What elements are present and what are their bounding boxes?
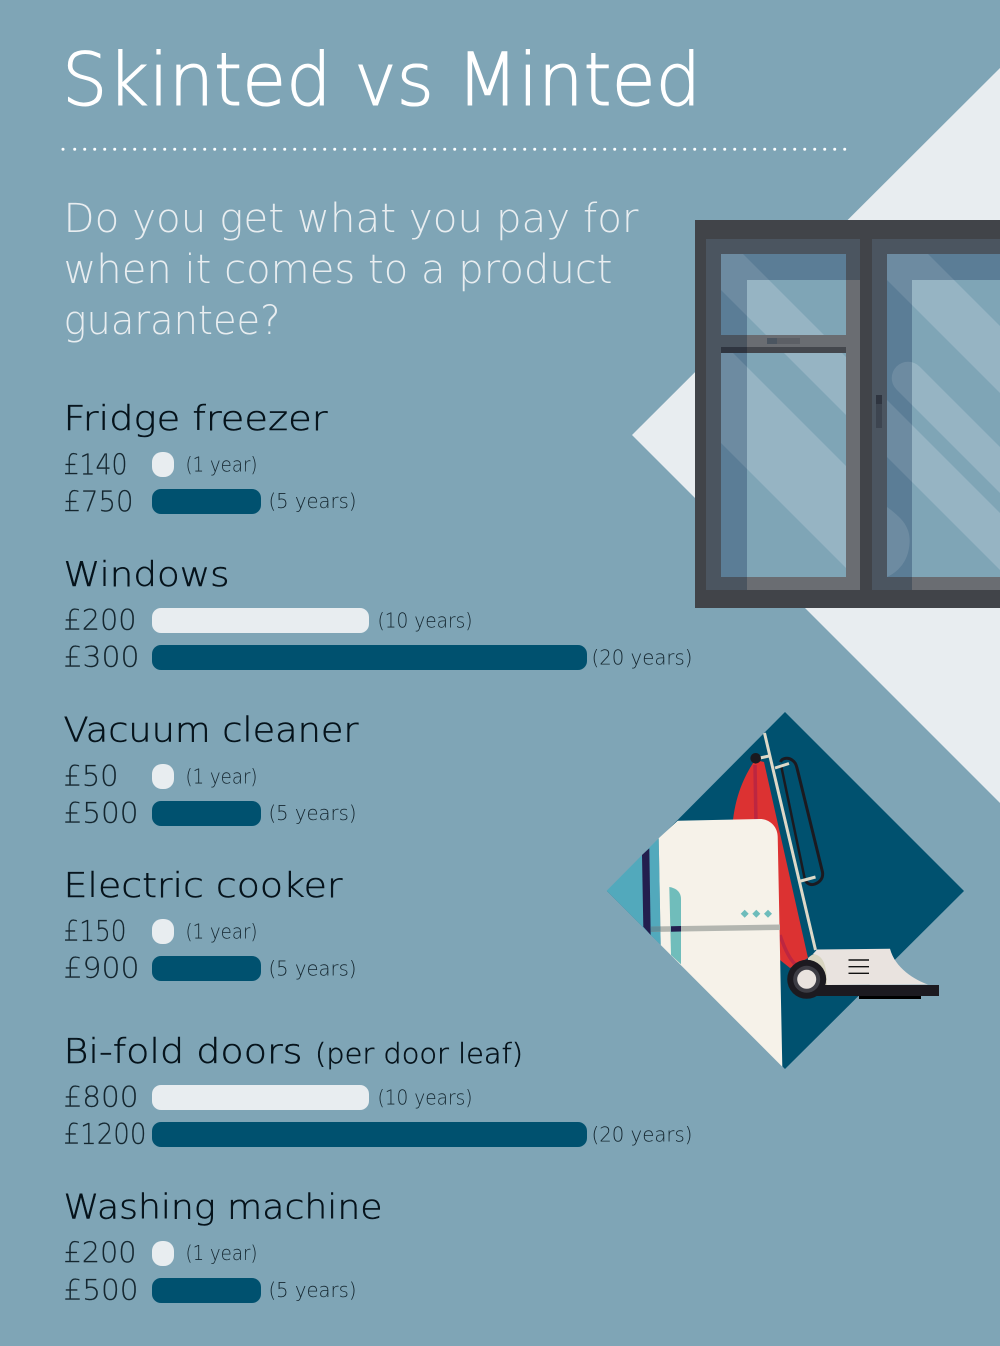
section: fridge freezer: (1 year) [186, 452, 258, 476]
section: vacuum cleaner [64, 710, 359, 830]
title: Skinted vs Minted [62, 38, 701, 123]
section: fridge freezer: (5 years) [268, 489, 356, 513]
section: bi-fold doors: (20 years) [592, 1122, 692, 1146]
subtitle [64, 196, 639, 344]
section: electric cooker: (5 years) [268, 956, 356, 980]
section: washing machine: £500 [64, 1274, 138, 1307]
teal corner [607, 838, 661, 945]
subtitle: Do you get what you pay for [64, 196, 639, 242]
section: vacuum cleaner: £50 [64, 760, 118, 793]
illustration: window [695, 220, 1000, 608]
section: washing machine: (1 year) [186, 1241, 258, 1265]
section: vacuum cleaner: (5 years) [268, 801, 356, 825]
illustration: dark blue diamond with fridge and vacuum [607, 712, 964, 1069]
section: electric cooker: (1 year) [186, 920, 258, 944]
section: washing machine: (5 years) [268, 1278, 356, 1302]
section: windows: £200 [64, 604, 136, 637]
left sash frame [706, 239, 860, 590]
section: electric cooker [64, 866, 356, 985]
section: fridge freezer: Fridge freezer [64, 399, 328, 439]
section: windows: (10 years) [378, 608, 472, 632]
section: fridge freezer: £140 [64, 448, 128, 482]
vacuum pole and handle [750, 733, 823, 950]
fridge [651, 819, 782, 1067]
section: electric cooker: Electric cooker [64, 866, 343, 906]
section: fridge freezer [64, 399, 356, 518]
background light diamond [632, 68, 1000, 803]
window handle [876, 395, 882, 428]
section: electric cooker: £900 [64, 952, 140, 985]
section: washing machine [64, 1188, 382, 1307]
right sash frame [872, 239, 1000, 590]
section: bi-fold doors [64, 1032, 692, 1151]
vacuum bag [732, 760, 808, 968]
section: vacuum cleaner: Vacuum cleaner [64, 710, 359, 750]
subtitle: when it comes to a product [64, 247, 612, 293]
section: vacuum cleaner: (1 year) [186, 764, 258, 788]
section: washing machine: Washing machine [64, 1188, 382, 1228]
vacuum head [787, 949, 939, 999]
section: bi-fold doors: £1200 [64, 1118, 146, 1151]
subtitle: guarantee? [64, 298, 280, 344]
left glass panes [721, 254, 846, 577]
section: electric cooker: £150 [64, 915, 126, 948]
section: washing machine: £200 [64, 1236, 136, 1270]
section: fridge freezer: £750 [64, 486, 134, 518]
section: windows: (20 years) [592, 646, 692, 670]
section: bi-fold doors: £800 [64, 1081, 138, 1114]
section: windows: £300 [64, 641, 140, 674]
section: bi-fold doors: (10 years) [378, 1086, 472, 1110]
transom rail [721, 335, 846, 347]
section: bi-fold doors: (per door leaf) [315, 1037, 523, 1070]
section: vacuum cleaner: £500 [64, 797, 138, 830]
section: windows [64, 555, 692, 674]
right glass pane [887, 254, 1000, 577]
section: bi-fold doors: Bi-fold doors [64, 1032, 302, 1072]
section: windows: Windows [64, 555, 230, 595]
